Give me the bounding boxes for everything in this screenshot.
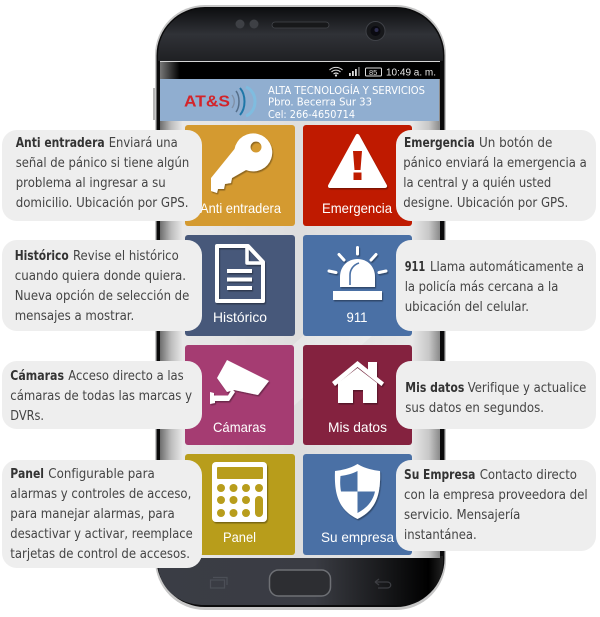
logo AT&S: AT&S <box>184 94 230 110</box>
company text: Cel: 266-4650714 <box>268 108 355 121</box>
icon: key <box>211 133 272 193</box>
tile: Mis datos <box>303 345 412 445</box>
callout: Su Empresa: instantánea. <box>404 527 477 543</box>
callout: Cámaras: DVRs. <box>10 409 44 424</box>
home button <box>270 570 330 596</box>
callout: Anti entradera: domicilio. Ubicación por GPS. <box>16 195 189 211</box>
battery icon <box>366 68 382 77</box>
signal icon <box>349 67 360 76</box>
tile: 911 <box>303 235 412 336</box>
callout: Anti entradera: Enviará una <box>109 135 178 151</box>
bottom bezel <box>158 556 443 605</box>
callout: Panel: alarmas y controles de acceso, <box>10 487 191 502</box>
icon: document <box>217 246 263 301</box>
front camera <box>366 22 385 40</box>
tile: Anti entradera <box>185 125 295 226</box>
callout: 911: 911 <box>405 260 425 275</box>
callout: Anti entradera: Anti entradera <box>16 136 105 151</box>
sensor dots <box>236 20 258 28</box>
status bar <box>160 62 440 79</box>
label: 911 <box>346 309 368 325</box>
label: Anti entradera <box>200 200 281 216</box>
speaker grille <box>272 22 329 28</box>
callout: Su Empresa <box>396 460 596 551</box>
tile: Cámaras <box>185 345 294 445</box>
callout: Su Empresa: Su Empresa <box>404 468 475 483</box>
callout: Mis datos: Mis datos <box>405 381 464 396</box>
callout: Histórico: Nueva opción de selección de <box>15 288 189 304</box>
callout: 911: Llama automáticamente a <box>430 259 584 275</box>
phone body <box>153 5 446 610</box>
callout: Emergencia: la central y a quién usted <box>403 175 551 191</box>
callout: Emergencia: Emergencia <box>404 136 475 151</box>
clock: 10:49 a. m. <box>386 66 436 78</box>
callout: 911: la policía más cercana a la <box>405 279 558 295</box>
screen background <box>160 61 440 558</box>
callout: Cámaras: Acceso directo a las <box>68 369 184 384</box>
icon: shield <box>335 464 380 519</box>
app header <box>160 79 439 121</box>
top bezel <box>158 8 443 61</box>
label: Cámaras <box>213 419 266 435</box>
callout: Mis datos: Verifique y actualice <box>468 381 586 396</box>
tile: Histórico <box>185 235 295 336</box>
callout: Panel <box>2 460 202 568</box>
recents key <box>210 578 227 588</box>
callout: Emergencia: Un botón de <box>479 135 552 151</box>
company text: ALTA TECNOLOGÍA Y SERVICIOS <box>268 84 425 97</box>
callout: Anti entradera: señal de pánico si tiene algún <box>16 155 189 171</box>
callout: Histórico: Histórico <box>15 248 69 264</box>
tile: Su empresa <box>303 454 412 555</box>
callout: Su Empresa: Contacto directo <box>480 468 577 483</box>
callout: Emergencia: designe. Ubicación por GPS. <box>403 195 568 211</box>
callout: Anti entradera <box>2 130 202 221</box>
icon: house <box>332 361 384 403</box>
callout: Panel: Configurable para <box>48 467 155 482</box>
callout: 911 <box>396 240 596 331</box>
callout: Mis datos: sus datos en segundos. <box>405 401 544 416</box>
callout: 911: ubicación del celular. <box>405 299 529 315</box>
callout: Anti entradera: problema al ingresar a su <box>16 176 166 191</box>
label: Panel <box>223 529 256 545</box>
label: Su empresa <box>321 529 394 545</box>
battery icon: 85 <box>369 68 377 77</box>
callout: Panel: para manejar alarmas, para <box>10 507 175 522</box>
icon: keypad <box>212 462 267 522</box>
callout: Panel: tarjetas de control de accesos. <box>10 547 190 562</box>
callout: Histórico: mensajes a mostrar. <box>15 309 134 324</box>
callout: Histórico <box>2 240 202 331</box>
callout: Cámaras: cámaras de todas las marcas y <box>10 388 192 404</box>
icon: warning triangle <box>330 136 385 186</box>
callout: Panel: desactivar y activar, reemplace <box>10 527 193 542</box>
logo AT&S <box>184 87 255 116</box>
callout: Cámaras: Cámaras <box>10 368 64 384</box>
company text: Pbro. Becerra Sur 33 <box>268 96 372 108</box>
back key <box>375 579 391 588</box>
company text <box>268 84 425 121</box>
callout: Histórico: Revise el histórico <box>73 248 179 264</box>
label: Mis datos <box>328 419 387 435</box>
icon: siren <box>329 248 386 300</box>
callout: Emergencia <box>396 130 596 221</box>
label: Emergencia <box>322 200 392 216</box>
label: Histórico <box>213 309 267 325</box>
callout: Mis datos <box>396 361 596 429</box>
callout: Cámaras <box>2 361 202 429</box>
callout: Panel: Panel <box>10 467 44 482</box>
icon: security camera <box>210 360 269 404</box>
callout: Su Empresa: servicio. Mensajería <box>404 507 520 523</box>
callout: Histórico: cuando quiera donde quiera. <box>15 269 186 284</box>
tile: Panel <box>185 454 295 555</box>
wifi icon <box>330 67 342 76</box>
tile: Emergencia <box>303 125 412 226</box>
